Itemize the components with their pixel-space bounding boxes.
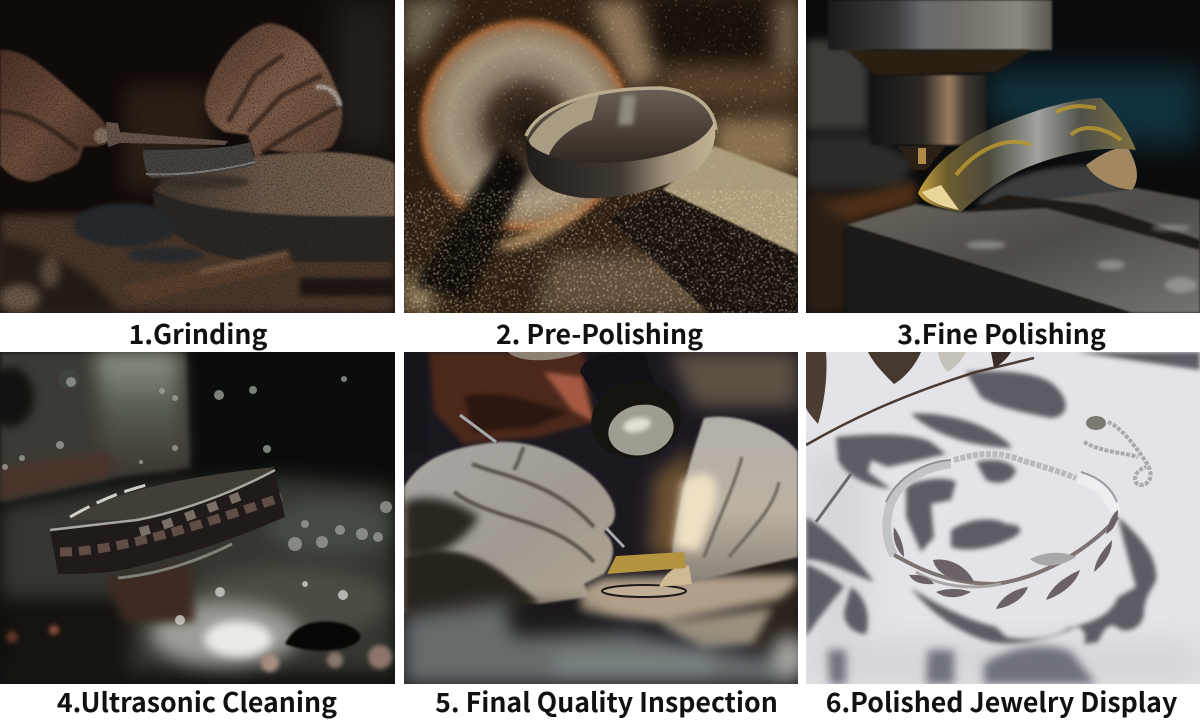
icon: wooden handle — [122, 251, 296, 303]
icon: grey background panel — [806, 40, 916, 190]
caption: step 4: 4.Ultrasonic Cleaning — [57, 681, 337, 720]
icon: gloved left hand — [404, 442, 615, 622]
icon: silver ring bracelet — [524, 88, 716, 198]
panel: step 3 fine polishing photo — [806, 0, 1200, 313]
icon: skin and stone grain texture — [0, 0, 395, 313]
icon: dark porthole — [0, 367, 34, 427]
icon: glove cuff fringe — [659, 566, 692, 587]
icon: distant shadows — [828, 646, 1096, 684]
icon: dark groove on block — [966, 195, 1200, 250]
icon: inner band back — [1086, 148, 1137, 190]
icon: soft paper shading — [806, 452, 1200, 684]
icon: metal dust — [73, 175, 250, 263]
icon: bracelet chain — [954, 454, 1076, 478]
icon: brown reflection — [0, 452, 110, 500]
icon: surface under bracelet — [976, 165, 1126, 210]
caption: step 6: 6.Polished Jewelry Display — [826, 681, 1177, 720]
icon: glare on water — [150, 602, 300, 666]
icon: dense lower sparks — [404, 190, 798, 313]
icon: chain clasp — [1086, 416, 1106, 430]
icon: right hand — [205, 23, 342, 158]
icon: machine spindle — [828, 0, 1052, 170]
icon: silver leaf bracelet — [886, 460, 1118, 609]
icon: spinning polishing wheel — [418, 17, 634, 233]
icon: leaf shadows — [806, 352, 1200, 644]
icon: blurred background right — [649, 352, 798, 612]
icon: brown workbench glow — [806, 180, 916, 313]
icon: oval shadow ring — [602, 585, 686, 597]
caption: step 2: 2. Pre-Polishing — [496, 313, 703, 352]
icon: textured bracelet — [50, 467, 285, 578]
icon: bracelet — [143, 142, 255, 178]
icon: bottom reflections — [6, 625, 392, 672]
icon: light beam — [95, 352, 185, 467]
caption: step 1: 1.Grinding — [129, 313, 267, 352]
icon: stem shadow — [816, 474, 851, 522]
icon: workpiece block dark face — [609, 190, 798, 313]
icon: hand tool blade — [106, 122, 228, 147]
icon: gold bracelet piece — [607, 552, 686, 574]
icon: background tank wall — [0, 352, 190, 502]
icon: magnifying loupe — [580, 352, 688, 467]
icon: inspector face — [404, 352, 594, 452]
icon: plant branch — [806, 352, 1034, 445]
icon: air bubbles — [2, 369, 392, 625]
caption: step 5: 5. Final Quality Inspection — [435, 681, 778, 720]
icon: blurred foreground machine — [404, 602, 807, 684]
icon: lower wheel glow — [494, 200, 589, 250]
icon: workpiece block top — [662, 146, 798, 255]
caption: step 3: 3.Fine Polishing — [897, 313, 1106, 352]
panel: step 2 pre-polishing photo — [404, 0, 798, 313]
icon: block highlights — [966, 225, 1197, 293]
icon: workbench — [579, 574, 798, 652]
icon: metal block front face — [846, 225, 1131, 313]
panel: step 4 ultrasonic cleaning photo — [0, 352, 395, 684]
icon: dark puddle — [285, 621, 360, 651]
icon: grinding stone — [153, 152, 395, 262]
icon: water surface — [0, 477, 395, 684]
icon: clasp chain — [1084, 422, 1151, 485]
icon: blurred background machinery — [404, 0, 798, 313]
panel: step 1 grinding photo — [0, 0, 395, 313]
icon: metal block top surface — [846, 188, 1200, 313]
icon: dark shaft shadow — [414, 145, 529, 300]
panel: step 5 final quality inspection photo — [404, 352, 798, 684]
panel: step 6 polished jewelry display photo — [806, 352, 1200, 684]
icon: blurred foreground tool — [0, 240, 120, 313]
icon: left hand — [0, 50, 110, 181]
icon: gloved right hand — [672, 417, 798, 584]
icon: tweezers — [460, 415, 624, 547]
icon: engraved metal band — [918, 98, 1136, 212]
icon: bracelet reflection — [105, 564, 195, 622]
icon: teal background glow — [986, 70, 1200, 145]
icon: glasses rim — [508, 352, 582, 360]
icon: sparse upper sparks — [404, 0, 798, 190]
